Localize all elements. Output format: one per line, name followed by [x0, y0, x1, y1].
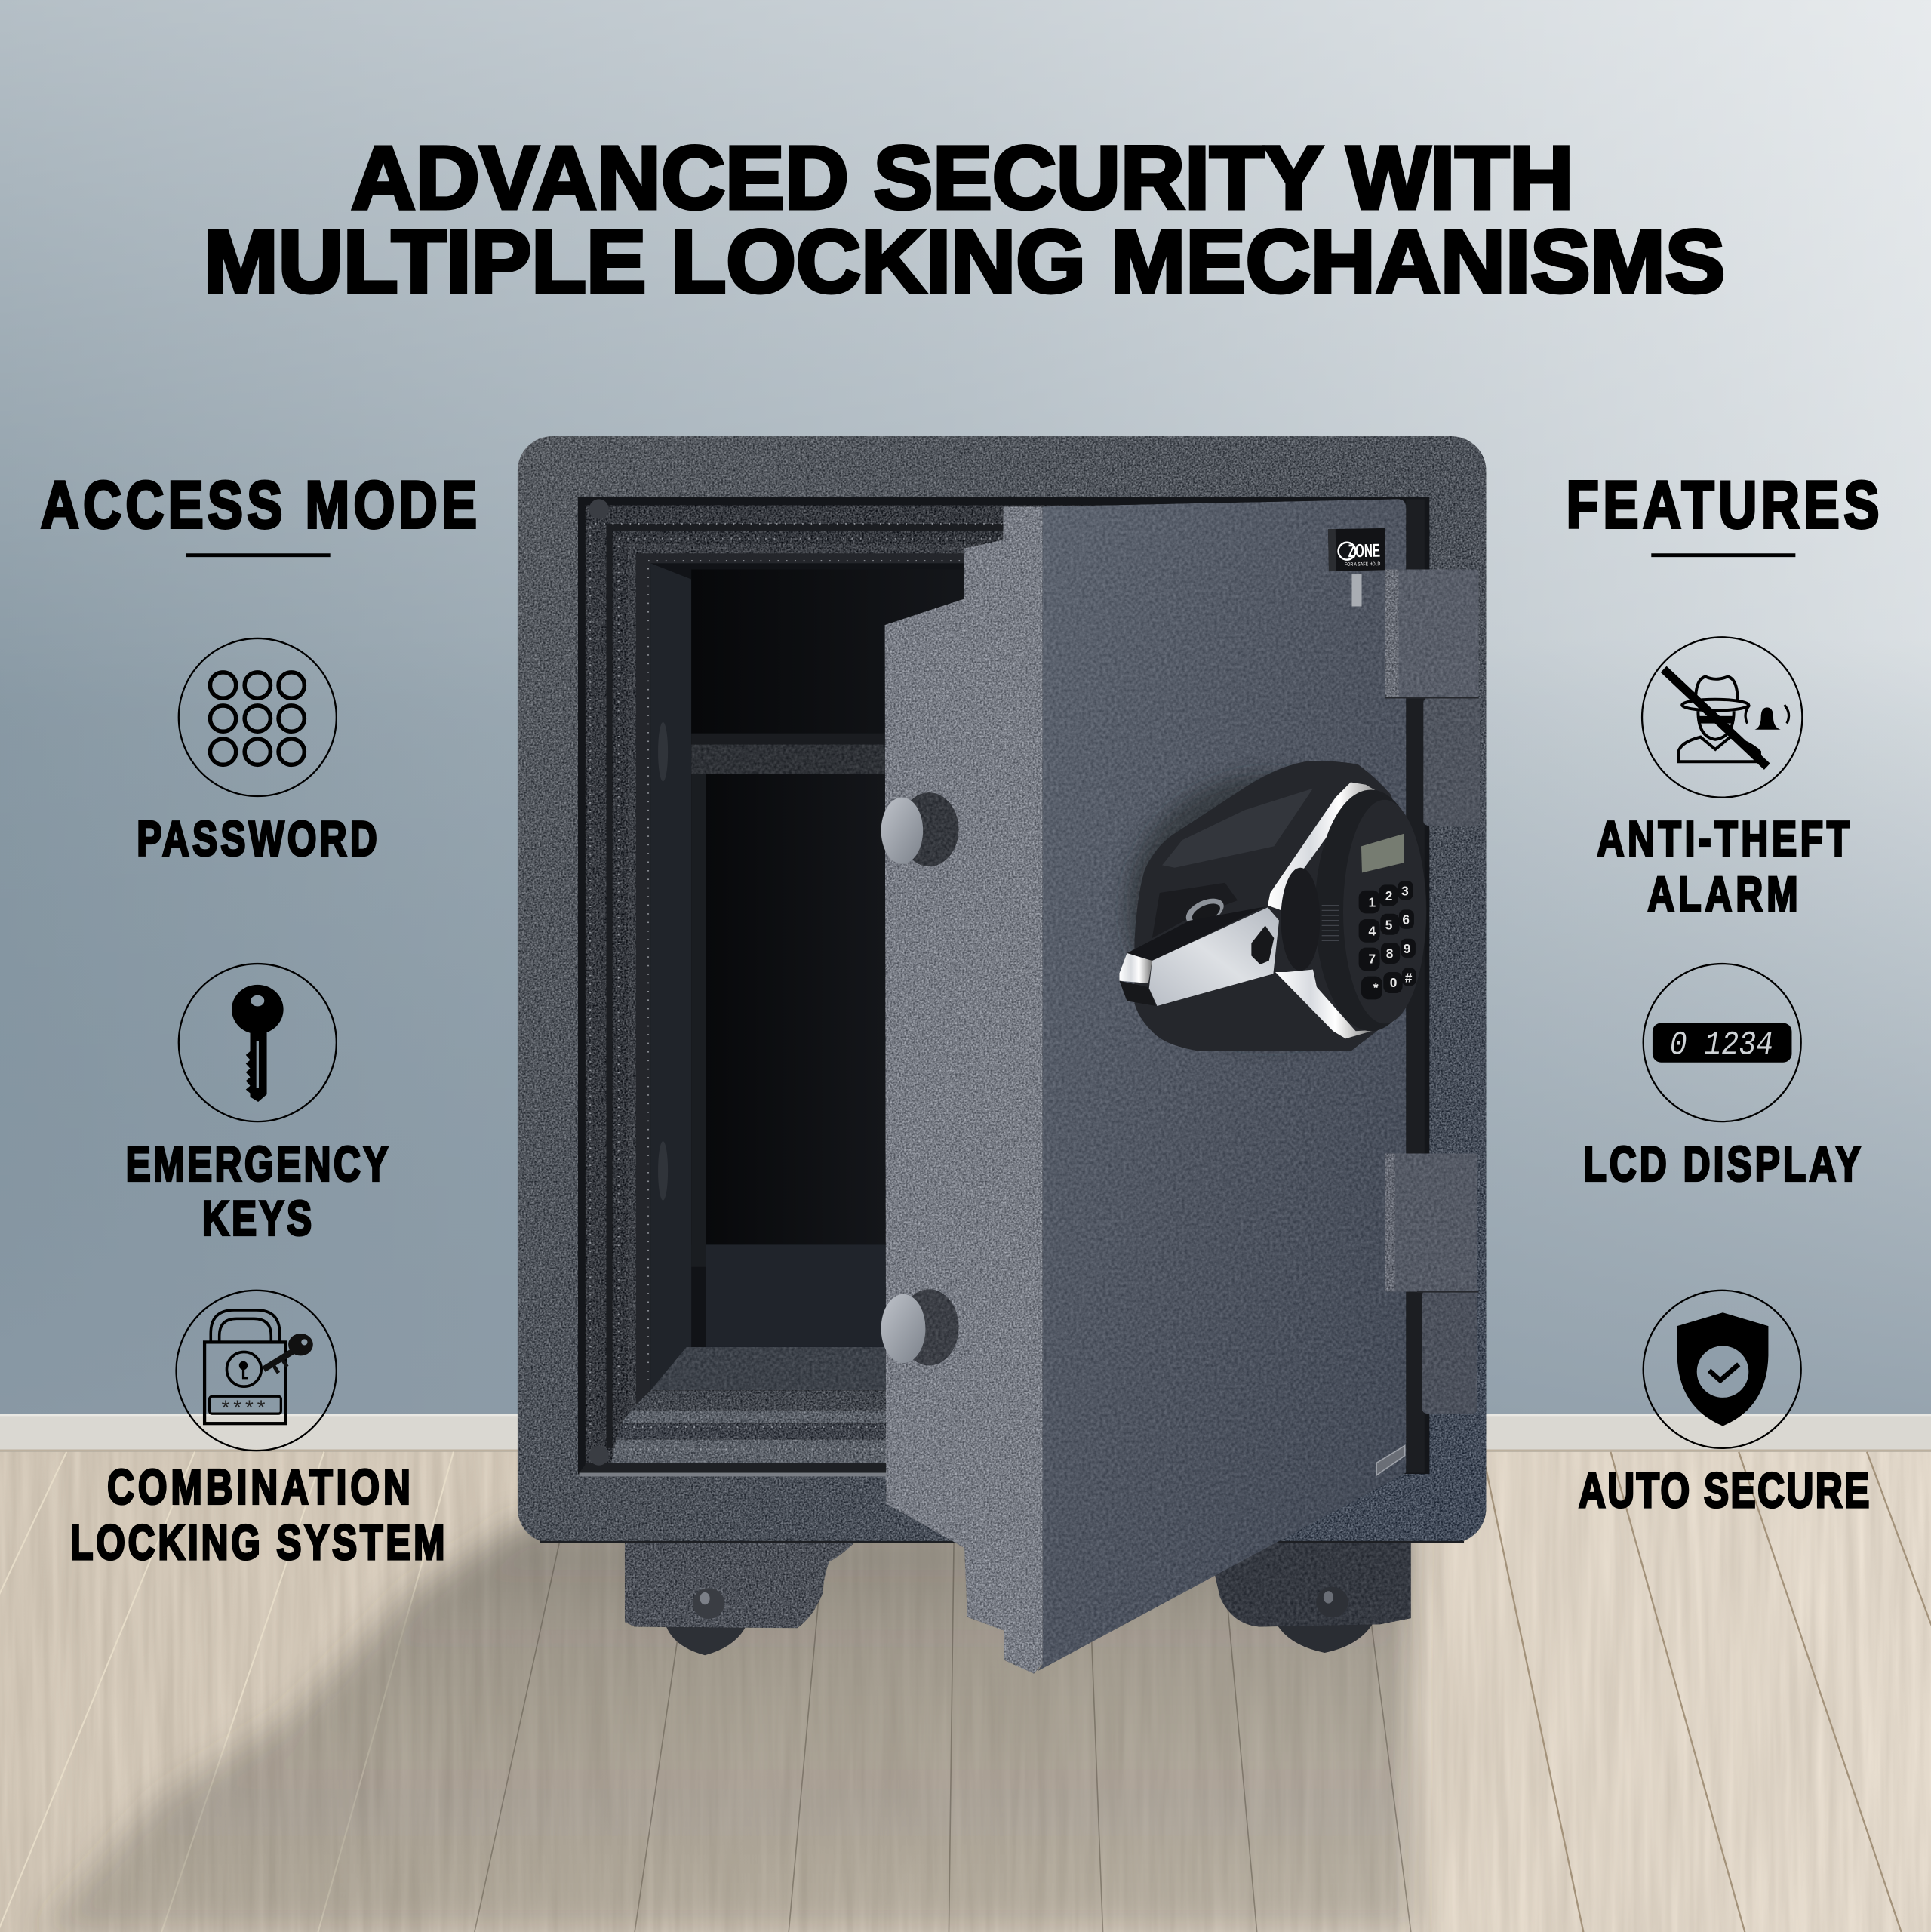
lever top [1127, 906, 1265, 961]
panel: access mode [41, 467, 477, 1570]
door edge [885, 506, 1043, 1674]
icon: shield check [1644, 1291, 1801, 1448]
keypad labels: 5 [1385, 917, 1393, 932]
lower door nameplate [1376, 1446, 1405, 1475]
speaker bulge [1281, 868, 1320, 971]
shelf [691, 744, 901, 774]
wooden floor [0, 1452, 1931, 1932]
keypad labels: 7 [1368, 951, 1376, 966]
icon: key [179, 964, 337, 1121]
housing upper panel [1162, 789, 1313, 868]
right channel behind door [1406, 499, 1425, 1473]
heading underline [1651, 553, 1795, 557]
icon: combination lock: **** [222, 1396, 269, 1420]
heading underline [186, 553, 331, 557]
dial body [1315, 789, 1427, 1031]
right foot [1213, 1536, 1411, 1653]
brand tag: FOR A SAFE HOLD [1345, 561, 1381, 568]
heading: features: FEATURES [1567, 467, 1879, 542]
housing recess [1152, 883, 1238, 938]
speaker grille [1322, 906, 1339, 940]
lever nose [1119, 953, 1152, 983]
frame highlights [590, 524, 1004, 1449]
key cylinder [1182, 893, 1228, 931]
keypad labels [1368, 883, 1413, 995]
lock housing [1134, 761, 1426, 1051]
bottom hinge [1385, 1154, 1479, 1414]
panel: features [1567, 467, 1879, 1518]
keypad labels: 4 [1368, 924, 1376, 939]
floor shadow [37, 1523, 1415, 1932]
keypad [1359, 881, 1416, 999]
label: combination locking system [70, 1460, 445, 1570]
interior of the safe [650, 563, 973, 1390]
label: emergency keys: KEYS [202, 1191, 312, 1246]
label: auto secure: AUTO SECURE [1579, 1463, 1869, 1518]
title: ADVANCED SECURITY WITH [351, 128, 1573, 227]
label: emergency keys: EMERGENCY [126, 1137, 388, 1192]
lock shadow [1127, 774, 1412, 1045]
icon: combination lock [177, 1291, 337, 1451]
left foot [625, 1536, 862, 1655]
upper door bolt [881, 792, 959, 866]
icon: anti-theft alarm [1642, 637, 1802, 798]
keypad labels: * [1373, 980, 1379, 995]
label: anti-theft alarm [1597, 811, 1850, 921]
wall background [0, 0, 1931, 1417]
title: MULTIPLE LOCKING MECHANISMS [203, 212, 1725, 311]
label: LCD display: LCD DISPLAY [1583, 1137, 1861, 1192]
brand tag: ZONE [1348, 541, 1380, 561]
label: password: PASSWORD [137, 811, 377, 866]
chrome lever [1149, 907, 1279, 1006]
LCD screen [1361, 834, 1404, 872]
label: emergency keys [126, 1137, 388, 1246]
brand tag [1328, 528, 1385, 571]
heading: access mode: ACCESS MODE [41, 467, 477, 542]
keypad labels: 3 [1401, 883, 1409, 898]
icon: LCD display: 0 1234 [1670, 1026, 1773, 1064]
icon: password keypad [179, 638, 337, 796]
safe [518, 436, 1486, 1674]
lower door bolt [881, 1289, 959, 1365]
keypad labels: 9 [1404, 941, 1410, 956]
safe opening [578, 497, 1429, 1476]
label: combination locking system: LOCKING SYSTEM [70, 1515, 445, 1570]
chrome strip lower [1275, 970, 1376, 1038]
keypad labels: 1 [1368, 894, 1376, 909]
label: combination locking system: COMBINATION [107, 1460, 410, 1515]
icon: LCD display [1644, 964, 1801, 1121]
title [203, 128, 1725, 311]
door front face [1038, 499, 1406, 1671]
keypad labels: 0 [1390, 975, 1397, 990]
door sticker [1351, 574, 1362, 606]
corner rivets [589, 499, 609, 1466]
dial face [1343, 800, 1426, 1023]
chrome strip upper [1268, 782, 1387, 910]
keypad labels: 2 [1385, 888, 1392, 903]
skirting board [0, 1414, 1931, 1452]
keypad labels: 6 [1402, 912, 1410, 928]
keypad labels: 8 [1386, 946, 1394, 961]
safe body frame [518, 436, 1486, 1543]
top hinge [1385, 569, 1480, 826]
label: anti-theft alarm: ANTI-THEFT [1597, 811, 1850, 866]
bottom ledges [580, 1390, 899, 1476]
lever hole [1251, 925, 1274, 964]
label: anti-theft alarm: ALARM [1647, 866, 1798, 921]
electronic lock [1119, 761, 1427, 1051]
keypad labels: # [1405, 970, 1413, 985]
